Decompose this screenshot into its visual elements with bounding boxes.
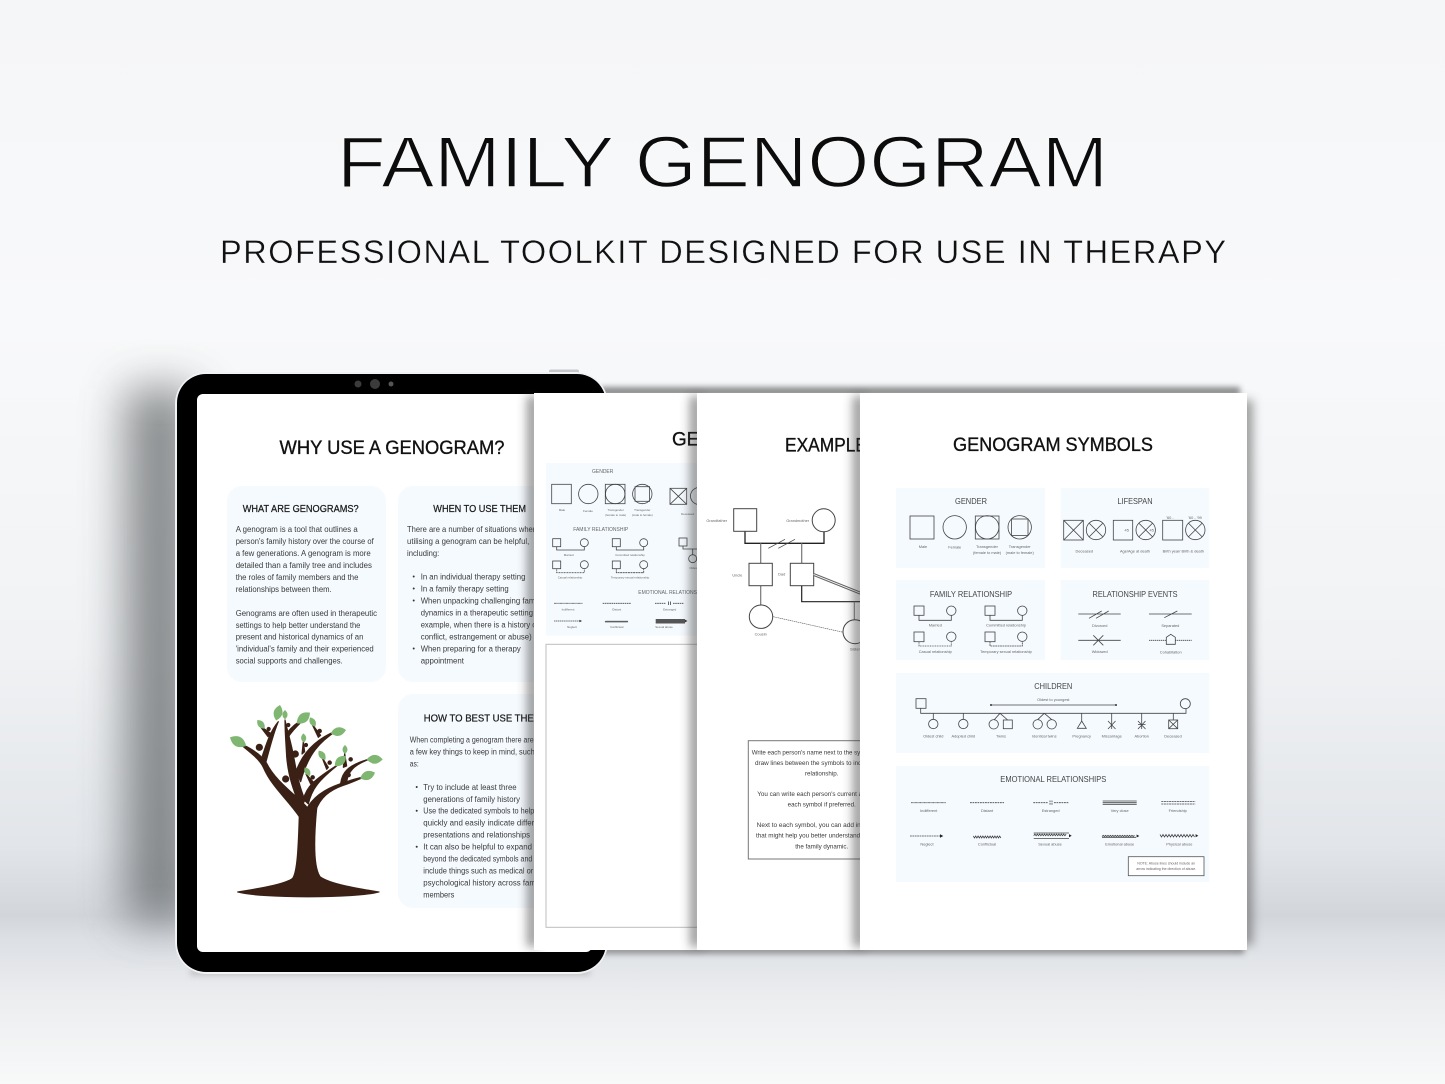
panel: lifespan: Age/Age at death: [1120, 549, 1150, 554]
panel: children: Pregnancy: [1072, 733, 1091, 738]
worksheet symbol key: Conflictual: [610, 625, 624, 629]
panel: lifespan: Birth year/ Birth & death: [1163, 549, 1204, 554]
example instructions box: that might help you better understand them and: [756, 832, 889, 840]
example instructions box: the family dynamic.: [795, 844, 848, 850]
panel: gender: Female: [948, 544, 961, 550]
panel: emotional relationships: Neglect: [920, 841, 935, 846]
card: how to best use them: members: [423, 890, 454, 899]
card: how to best use them: When completing a genogram there are: [410, 735, 534, 744]
panel: relationship events: Separated: [1161, 623, 1179, 628]
card: what are genograms: [227, 486, 386, 682]
example family diagram: Grandfather: [706, 518, 728, 523]
panel: family relationship: [896, 580, 1045, 660]
worksheet symbol key: EMOTIONAL RELATIONSHIPS: [638, 590, 709, 596]
example heading: EXAMPLE GENOGRAM: [785, 436, 975, 456]
panel: family relationship: Temporary sexual relationship: [980, 649, 1032, 654]
panel: children: Adopted child: [952, 733, 975, 738]
symbols heading: GENOGRAM SYMBOLS: [953, 435, 1153, 456]
panel: gender: (male to female): [1006, 550, 1034, 555]
example instructions box: relationship.: [805, 770, 839, 778]
card: when to use them: appointment: [421, 656, 465, 666]
worksheet symbol key: Female: [583, 509, 593, 513]
tablet: [175, 370, 608, 974]
worksheet symbol key: Married: [564, 553, 574, 557]
worksheet symbol key: Male: [559, 508, 566, 512]
panel: emotional relationships: Sexual abuse: [1038, 841, 1062, 846]
panel: relationship events: Divorced: [1092, 623, 1107, 628]
panel: gender: Transgender: [1009, 544, 1031, 549]
panel: children: Deceased: [1164, 733, 1182, 738]
card: how to best use them: as:: [410, 759, 419, 768]
card: how to best use them: [398, 694, 568, 908]
card: what are genograms: relationships between them.: [236, 585, 332, 594]
example instructions box: Write each person's name next to the symbols, then: [752, 750, 892, 756]
card: how to best use them: presentations and relationships: [423, 831, 530, 840]
card: how to best use them: HOW TO BEST USE THEM: [424, 712, 542, 724]
worksheet symbol key: Transgender: [634, 508, 650, 512]
note box: arrow indicating the direction of abuse.: [1136, 867, 1196, 871]
card: what are genograms: A genogram is a tool that outlines a: [236, 525, 358, 534]
example instructions box: Next to each symbol, you can add information: [757, 822, 888, 829]
panel: relationship events: Widowed: [1092, 649, 1108, 654]
worksheet symbol key: Transgender: [608, 508, 624, 512]
panel: lifespan: 45: [1150, 528, 1154, 532]
card: what are genograms: WHAT ARE GENOGRAMS?: [243, 503, 359, 515]
card: what are genograms: present and historical dynamics of an: [236, 632, 363, 642]
card: what are genograms: social supports and challenges.: [236, 656, 343, 666]
worksheet symbol key: Casual relationship: [558, 576, 583, 580]
panel: children: Twins: [996, 733, 1006, 738]
worksheet symbol key: Indifferent: [562, 608, 575, 612]
example family diagram: Sister: [850, 646, 861, 651]
card: what are genograms: 'individual's family and their experienced: [236, 644, 374, 654]
panel: children: Miscarriage: [1102, 733, 1122, 738]
card: how to best use them: include things such as medical or: [423, 866, 534, 875]
card: when to use them: [398, 486, 568, 682]
panel: lifespan: '60 - '99: [1188, 515, 1202, 520]
card: how to best use them: Use the dedicated symbols to help: [423, 807, 535, 816]
worksheet symbol key: FAMILY RELATIONSHIP: [573, 527, 629, 533]
card: when to use them: In an individual therapy setting: [421, 572, 525, 582]
card: how to best use them: quickly and easily indicate different: [423, 819, 546, 828]
tablet heading: WHY USE A GENOGRAM?: [280, 438, 504, 459]
worksheet heading: GENOGRAM: [672, 430, 784, 450]
card: how to best use them: generations of family history: [423, 795, 520, 804]
card: when to use them: dynamics in a therapeutic setting (for: [421, 608, 547, 618]
panel: children: [896, 673, 1209, 753]
worksheet symbol key: Distant: [612, 608, 621, 612]
example family diagram: Grandmother: [786, 518, 810, 523]
worksheet symbol key: Neglect: [567, 625, 577, 629]
panel: emotional relationships: Physical abuse: [1166, 841, 1192, 846]
card: when to use them: including:: [407, 549, 439, 558]
panel: lifespan: 45: [1125, 528, 1129, 532]
panel: relationship events: [1061, 580, 1209, 660]
card: when to use them: utilising a genogram can be helpful,: [407, 537, 529, 546]
card: how to best use them: a few key things to keep in mind, such: [410, 747, 535, 756]
panel: emotional relationships: Conflictual: [978, 841, 996, 846]
worksheet symbol key: [546, 463, 909, 636]
worksheet symbol key: (female to male): [605, 513, 626, 517]
worksheet symbol key: Sexual abuse: [655, 625, 673, 629]
panel: lifespan: LIFESPAN: [1118, 496, 1152, 506]
panel: family relationship: Committed relationship: [986, 623, 1026, 628]
panel: gender: GENDER: [955, 496, 987, 506]
worksheet symbol key: Committed relationship: [615, 553, 645, 557]
card: when to use them: When unpacking challenging family: [421, 596, 543, 606]
panel: relationship events: Cohabitation: [1160, 650, 1182, 654]
card: when to use them: WHEN TO USE THEM: [433, 503, 526, 515]
worksheet blank drawing box: [546, 644, 909, 927]
example family diagram: Cousin: [755, 632, 767, 637]
card: what are genograms: settings to help better understand the: [236, 621, 361, 630]
panel: gender: (female to male): [973, 550, 1002, 555]
page: example genogram: [690, 393, 1084, 950]
card: what are genograms: a few generations. A genogram is more: [236, 549, 371, 558]
subtitle: PROFESSIONAL TOOLKIT DESIGNED FOR USE IN THERAPY: [220, 234, 1226, 270]
panel: lifespan: [1061, 488, 1209, 568]
panel: children: Oldest to youngest: [1037, 697, 1070, 702]
worksheet symbol key: (male to female): [632, 513, 653, 517]
panel: emotional relationships: Emotional abuse: [1105, 841, 1134, 846]
worksheet symbol key: Deceased: [681, 512, 695, 516]
panel: emotional relationships: Distant: [981, 808, 994, 813]
panel: emotional relationships: EMOTIONAL RELATIONSHIPS: [1000, 774, 1107, 784]
panel: gender: [896, 488, 1045, 568]
panel: children: Abortion: [1134, 733, 1149, 738]
worksheet symbol key: Estranged: [663, 608, 677, 612]
note box: [1128, 857, 1204, 876]
example instructions box: [748, 741, 895, 859]
panel: relationship events: RELATIONSHIP EVENTS: [1092, 589, 1178, 599]
panel: lifespan: '60 -: [1166, 515, 1174, 520]
card: what are genograms: person's family history over the course of: [236, 537, 374, 546]
tree illustration: [228, 704, 383, 897]
card: when to use them: When preparing for a therapy: [421, 644, 521, 654]
card: how to best use them: It can also be helpful to expand: [423, 843, 532, 852]
card: when to use them: conflict, estrangement or abuse): [421, 632, 532, 642]
panel: children: Identical twins: [1032, 733, 1057, 738]
panel: children: Oldest child: [923, 733, 943, 738]
panel: gender: Transgender: [976, 544, 999, 549]
worksheet symbol key: Oldest child: [689, 566, 705, 570]
panel: emotional relationships: Friendship: [1169, 808, 1187, 813]
card: when to use them: There are a number of situations when: [407, 525, 537, 534]
example family diagram: Uncle: [732, 572, 742, 577]
example instructions box: You can write each person's current age inside: [757, 791, 888, 798]
panel: family relationship: FAMILY RELATIONSHIP: [930, 589, 1012, 599]
title: FAMILY GENOGRAM: [337, 123, 1108, 203]
panel: gender: Male: [919, 544, 927, 549]
panel: family relationship: Married: [929, 623, 942, 628]
page: genogram symbols: [853, 393, 1247, 950]
card: when to use them: example, when there is a history of: [421, 620, 539, 630]
example instructions box: each symbol if preferred.: [788, 802, 856, 808]
page: blank genogram worksheet: [527, 393, 921, 950]
card: when to use them: In a family therapy setting: [421, 584, 509, 594]
panel: lifespan: Deceased: [1076, 549, 1093, 554]
panel: family relationship: Casual relationship: [919, 649, 952, 654]
card: what are genograms: detailed than a family tree and includes: [236, 561, 372, 570]
example family diagram: [706, 509, 900, 651]
card: how to best use them: Try to include at least three: [423, 783, 517, 792]
panel: emotional relationships: Very close: [1111, 808, 1129, 813]
card: how to best use them: psychological history across family: [423, 878, 543, 887]
panel: children: CHILDREN: [1034, 681, 1072, 691]
card: how to best use them: beyond the dedicated symbols and: [423, 855, 532, 864]
panel: emotional relationships: [896, 766, 1209, 882]
card: what are genograms: the roles of family members and the: [236, 573, 359, 582]
panel: emotional relationships: Indifferent: [920, 808, 938, 813]
example instructions box: draw lines between the symbols to indicate their: [755, 760, 889, 767]
example family diagram: Dad: [778, 571, 785, 576]
note box: NOTE: Abuse lines should include an: [1137, 862, 1195, 866]
panel: emotional relationships: Estranged: [1042, 808, 1060, 813]
card: what are genograms: Genograms are often used in therapeutic: [236, 609, 377, 618]
worksheet symbol key: GENDER: [592, 469, 614, 475]
worksheet symbol key: Temporary sexual relationship: [611, 576, 650, 580]
